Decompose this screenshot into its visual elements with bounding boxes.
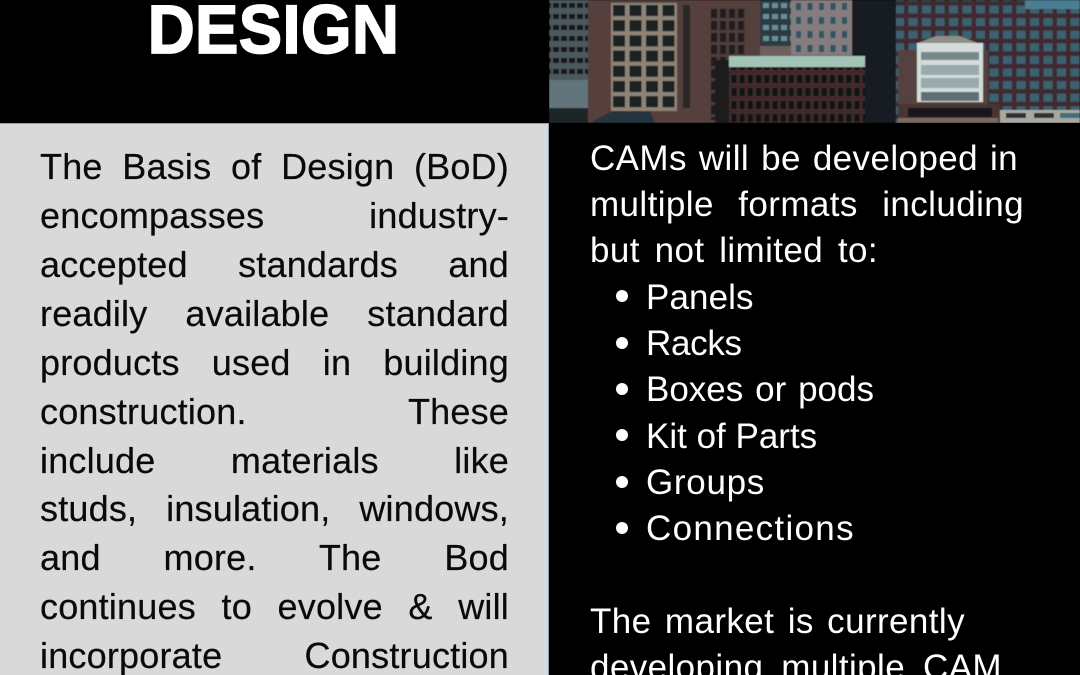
text block: basis of design paragraph: continues to evolve & will [40, 586, 509, 627]
text block: basis of design paragraph: include materials like [40, 440, 509, 481]
bullet: Groups: Groups [646, 463, 765, 502]
text block: market paragraph: The market is currently [590, 602, 965, 641]
text block: CAM formats intro: CAMs will be developed in [590, 139, 1018, 178]
bullet: Kit of Parts: Kit of Parts [646, 417, 817, 456]
text block: basis of design paragraph: accepted standards and [40, 244, 509, 285]
bullet: Connections: Connections [646, 509, 855, 548]
text block: CAM formats intro: but not limited to: [590, 231, 878, 270]
text block: basis of design paragraph: incorporate Construction [40, 635, 509, 675]
text block: basis of design paragraph: encompasses industry- [40, 195, 509, 236]
bullet: Boxes or pods: Boxes or pods [646, 370, 874, 409]
text block: basis of design paragraph: construction. These [40, 391, 509, 432]
text block: basis of design paragraph [40, 146, 509, 675]
text block: basis of design paragraph: and more. The Bod [40, 537, 509, 578]
panel: basis of design text [0, 123, 549, 675]
list: CAM formats [616, 278, 874, 548]
text block: basis of design paragraph: products used in building [40, 342, 509, 383]
text block: basis of design paragraph: studs, insulation, windows, [40, 488, 509, 529]
text block: CAM formats intro [590, 139, 1024, 270]
photo: city buildings [549, 0, 1080, 123]
bullet: Racks: Racks [646, 324, 742, 363]
text block: market paragraph [590, 602, 1002, 675]
text block: CAM formats intro: multiple formats including [590, 185, 1024, 224]
text block: basis of design paragraph: readily available standard [40, 293, 509, 334]
text block: basis of design paragraph: The Basis of Design (BoD) [40, 146, 509, 187]
bullet: Panels: Panels [646, 278, 754, 317]
